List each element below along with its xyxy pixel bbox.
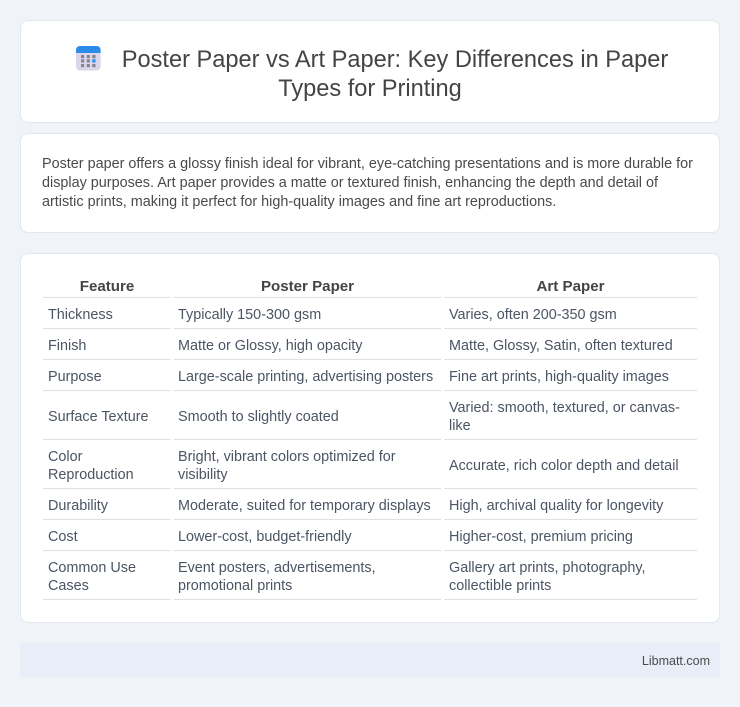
row: color reproduction: Bright, vibrant colors optimized for bbox=[178, 449, 396, 465]
panel: introduction bbox=[20, 133, 720, 233]
title bbox=[122, 47, 668, 102]
row: color reproduction: Accurate, rich color depth and detail bbox=[449, 458, 679, 474]
row: purpose: Fine art prints, high-quality images bbox=[449, 369, 669, 385]
text block: introduction: Poster paper offers a glossy finish ideal for vibrant, eye-catching presentations and is more durable for bbox=[42, 156, 693, 172]
title: Types for Printing bbox=[278, 76, 462, 102]
footer text: Libmatt.com bbox=[642, 654, 710, 668]
row: purpose bbox=[48, 369, 669, 385]
text block: introduction: artistic prints, making it perfect for high-quality images and fine art reproductions. bbox=[42, 194, 556, 210]
row: finish: Matte, Glossy, Satin, often textured bbox=[449, 338, 673, 354]
table header: Feature bbox=[80, 278, 134, 295]
row: purpose: Large-scale printing, advertising posters bbox=[178, 369, 433, 385]
row: finish: Matte or Glossy, high opacity bbox=[178, 338, 362, 354]
row: surface texture: Smooth to slightly coated bbox=[178, 409, 339, 425]
text block: introduction: display purposes. Art paper provides a matte or textured finish, enhancing the depth and detail of bbox=[42, 175, 658, 191]
row: surface texture: Surface Texture bbox=[48, 409, 149, 425]
row: cost: Lower-cost, budget-friendly bbox=[178, 529, 352, 545]
row: color reproduction bbox=[48, 449, 679, 483]
row: durability: Durability bbox=[48, 498, 108, 514]
row: surface texture: Varied: smooth, textured, or canvas- bbox=[449, 400, 680, 416]
row: color reproduction: Color bbox=[48, 449, 82, 465]
row: common use cases: Gallery art prints, photography, bbox=[449, 560, 646, 576]
row: surface texture bbox=[48, 400, 680, 434]
title: Poster Paper vs Art Paper: Key Differences in Paper bbox=[122, 47, 668, 73]
row: common use cases: Cases bbox=[48, 578, 89, 594]
table header: Art Paper bbox=[537, 278, 604, 295]
panel: header bbox=[20, 20, 720, 123]
row: color reproduction: visibility bbox=[178, 467, 228, 483]
text block: introduction bbox=[42, 156, 693, 210]
row: durability: Moderate, suited for temporary displays bbox=[178, 498, 431, 514]
row: common use cases: collectible prints bbox=[449, 578, 551, 594]
row: common use cases bbox=[48, 560, 646, 594]
row: durability: High, archival quality for longevity bbox=[449, 498, 663, 514]
row: purpose: Purpose bbox=[48, 369, 102, 385]
table header bbox=[80, 278, 604, 295]
row: thickness bbox=[48, 307, 617, 323]
row: cost: Higher-cost, premium pricing bbox=[449, 529, 633, 545]
row: finish bbox=[48, 338, 673, 354]
row: common use cases: Common Use bbox=[48, 560, 136, 576]
row: color reproduction: Reproduction bbox=[48, 467, 134, 483]
row: thickness: Typically 150-300 gsm bbox=[178, 307, 321, 323]
row: common use cases: Event posters, advertisements, bbox=[178, 560, 376, 576]
row: durability bbox=[48, 498, 664, 514]
row: common use cases: promotional prints bbox=[178, 578, 292, 594]
icon: calendar bbox=[76, 46, 101, 71]
row: cost: Cost bbox=[48, 529, 78, 545]
row: thickness: Varies, often 200-350 gsm bbox=[449, 307, 617, 323]
panel: comparison table bbox=[20, 253, 720, 623]
table header: Poster Paper bbox=[261, 278, 354, 295]
row: surface texture: like bbox=[449, 418, 471, 434]
row: cost bbox=[48, 529, 633, 545]
row: thickness: Thickness bbox=[48, 307, 113, 323]
column rules bbox=[43, 297, 697, 600]
footer bbox=[20, 643, 720, 677]
row: finish: Finish bbox=[48, 338, 86, 354]
